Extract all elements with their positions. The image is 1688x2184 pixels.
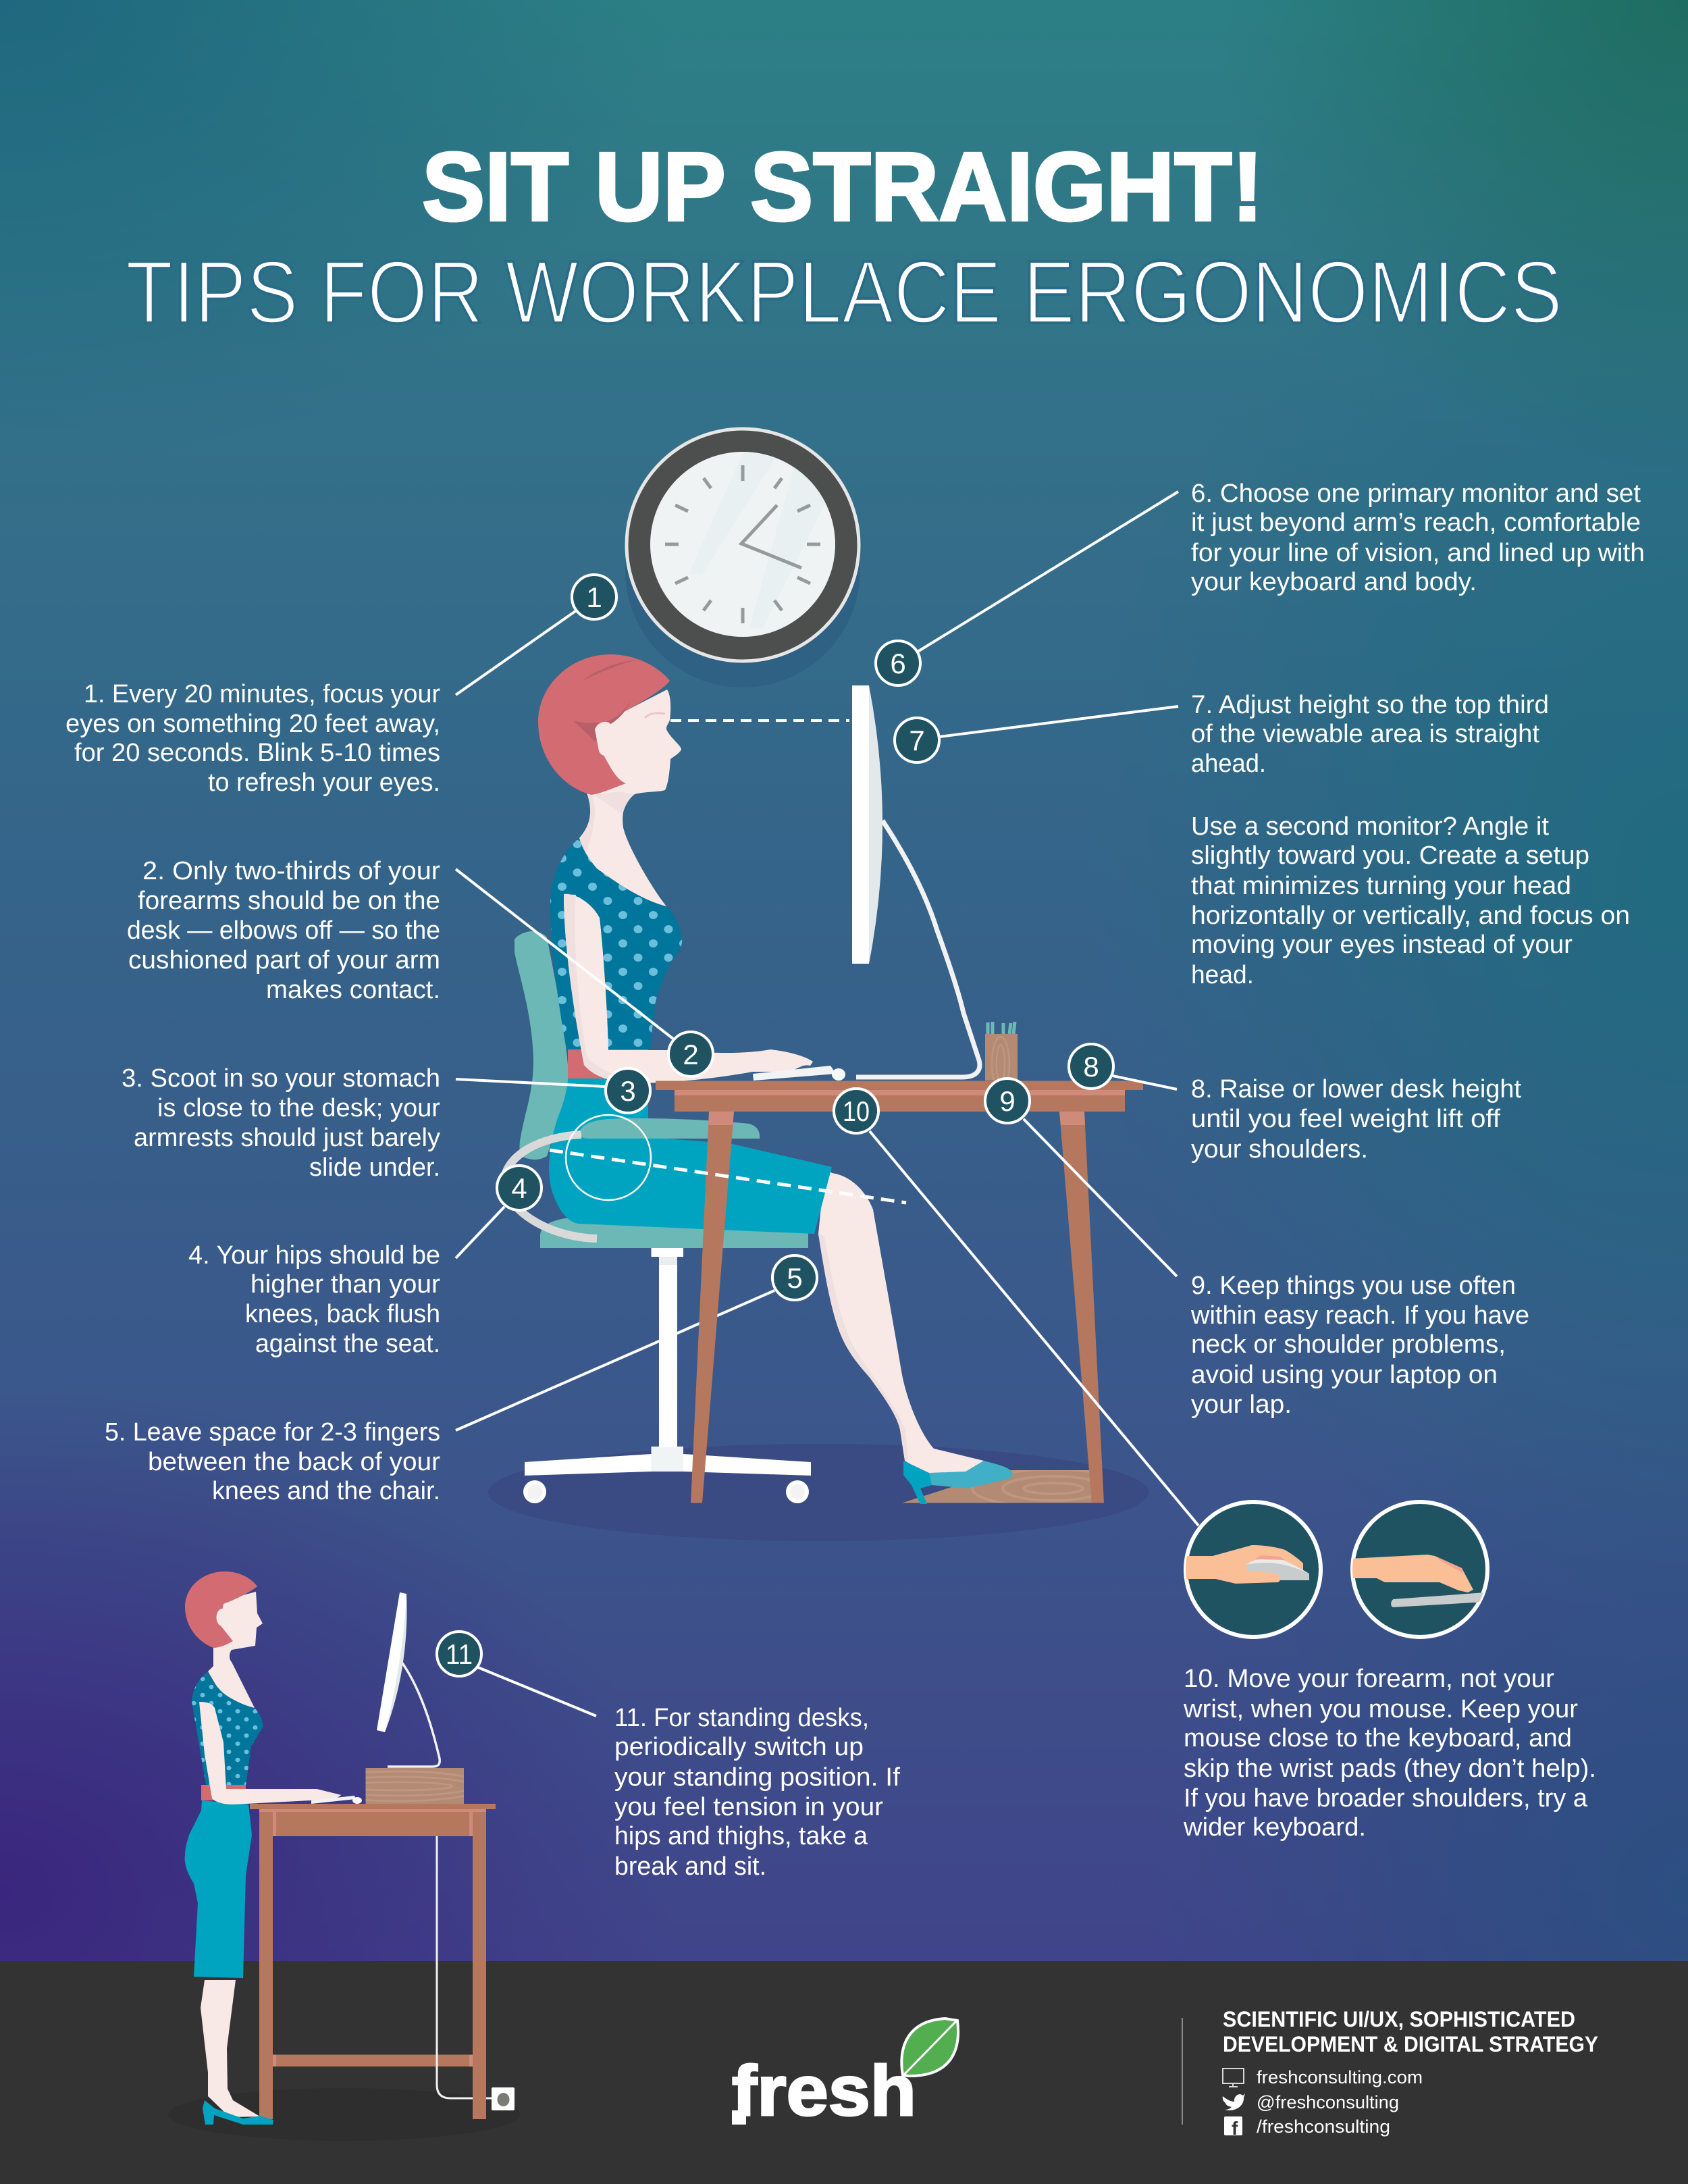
footer tagline	[1223, 2007, 1598, 2056]
tip 8 text: your shoulders.	[1191, 1135, 1368, 1164]
dress dots	[192, 1671, 263, 1786]
footer contact: facebook	[1224, 2116, 1390, 2139]
tip 10 text: If you have broader shoulders, try a	[1184, 1784, 1588, 1813]
heading: sit up straight: SIT UP STRAIGHT!	[422, 132, 1263, 241]
chair seat	[540, 1218, 808, 1248]
dashed eye line	[670, 719, 849, 722]
tip 7 text: of the viewable area is straight	[1191, 720, 1539, 748]
tip 2 text: forearms should be on the	[138, 887, 440, 915]
neck and face	[579, 690, 681, 908]
tip 9 text	[1190, 1272, 1529, 1419]
tip 10 text	[1183, 1665, 1596, 1842]
tip 3 text: 3. Scoot in so your stomach	[122, 1064, 440, 1093]
hip highlight circle	[566, 1115, 651, 1200]
tip 7 text: ahead.	[1191, 750, 1266, 778]
badge 4: 4	[511, 1172, 527, 1204]
badge 8: 8	[1083, 1051, 1099, 1083]
tip 6 text: for your line of vision, and lined up with	[1191, 539, 1645, 567]
badge 7	[895, 718, 939, 762]
tip 11 text: your standing position. If	[614, 1763, 900, 1792]
monitor	[852, 685, 980, 1077]
tip 4 text: higher than your	[250, 1270, 440, 1299]
leg	[201, 1980, 260, 2117]
badge 10	[834, 1089, 878, 1133]
tip 9 text: within easy reach. If you have	[1190, 1301, 1529, 1330]
tip 11 text	[614, 1704, 900, 1881]
tip 10 text: skip the wrist pads (they don’t help).	[1184, 1754, 1596, 1783]
badge 1	[572, 575, 616, 619]
wooden riser box	[366, 1768, 464, 1804]
eyebrow	[645, 713, 665, 718]
office chair base	[523, 1248, 811, 1503]
badge 5	[772, 1255, 817, 1300]
tip 2 text: makes contact.	[266, 976, 440, 1004]
tip 3 text: slide under.	[309, 1153, 440, 1182]
standing desk	[250, 1804, 496, 2119]
tip 7 text	[1191, 691, 1630, 989]
dress	[192, 1671, 263, 1786]
tip 7 text: 7. Adjust height so the top third	[1191, 691, 1549, 719]
tip 5 text: knees and the chair.	[212, 1477, 440, 1505]
tip 8 text: until you feel weight lift off	[1191, 1105, 1500, 1133]
tip 6 text	[1191, 479, 1645, 596]
dress dots	[550, 838, 682, 1054]
tip 10 text: wrist, when you mouse. Keep your	[1183, 1695, 1578, 1723]
badge 5: 5	[787, 1262, 803, 1294]
tip 9 text: your lap.	[1191, 1390, 1292, 1419]
badge 9	[985, 1078, 1030, 1123]
tip 4 text	[188, 1241, 440, 1358]
ear	[595, 722, 612, 756]
icon: hand on keyboard	[1350, 1502, 1487, 1637]
icon: monitor	[1223, 2069, 1244, 2087]
tip 4 text: against the seat.	[255, 1330, 440, 1358]
footer contact: twitter: @freshconsulting	[1257, 2092, 1399, 2112]
skirt	[185, 1800, 252, 1978]
leader line 5	[456, 1291, 774, 1430]
chair armrest	[580, 1118, 760, 1139]
badge 6	[876, 641, 920, 685]
shoe heel over footrest	[903, 1461, 932, 1504]
tip 7 text: Use a second monitor? Angle it	[1191, 812, 1549, 841]
tip 11 text: 11. For standing desks,	[614, 1704, 869, 1732]
tip 2 text	[127, 857, 440, 1004]
tip 6 text: 6. Choose one primary monitor and set	[1191, 479, 1641, 508]
tip 7 text: horizontally or vertically, and focus on	[1191, 902, 1630, 930]
arm	[199, 1702, 342, 1804]
shoe	[903, 1461, 1013, 1504]
tip 5 text: between the back of your	[148, 1448, 440, 1476]
tip 6 text: your keyboard and body.	[1191, 568, 1477, 596]
tip 10 text: 10. Move your forearm, not your	[1184, 1665, 1554, 1693]
tip 9 text: avoid using your laptop on	[1191, 1361, 1498, 1389]
tip 1 text	[65, 680, 440, 797]
tip 1 text: 1. Every 20 minutes, focus your	[84, 680, 440, 708]
badge 1: 1	[586, 581, 602, 613]
footer tagline: DEVELOPMENT & DIGITAL STRATEGY	[1223, 2032, 1598, 2056]
badge 3: 3	[620, 1075, 636, 1107]
badge 10: 10	[843, 1095, 870, 1127]
standing woman	[185, 1571, 342, 2125]
dashed hip line	[550, 1150, 906, 1203]
footrest	[902, 1470, 1092, 1503]
icon: hand on mouse	[1182, 1502, 1321, 1637]
logo leaf	[901, 2019, 958, 2076]
keyboard and mouse	[753, 1066, 845, 1081]
tip 2 text: cushioned part of your arm	[128, 946, 440, 974]
footer contact: website: freshconsulting.com	[1257, 2067, 1423, 2087]
badge 2: 2	[683, 1039, 699, 1070]
standing monitor	[377, 1592, 440, 1767]
tip 3 text: armrests should just barely	[134, 1124, 440, 1152]
tip 5 text: 5. Leave space for 2-3 fingers	[105, 1418, 440, 1447]
hair shading	[573, 659, 641, 742]
neck and face	[208, 1592, 263, 1709]
icon: wall clock	[625, 429, 860, 687]
arm shade	[564, 894, 641, 1083]
footer divider	[1182, 2018, 1183, 2125]
tip 4 text: 4. Your hips should be	[188, 1241, 440, 1270]
badge 6: 6	[890, 648, 906, 679]
tip 1 text: for 20 seconds. Blink 5-10 times	[74, 739, 440, 767]
floor shadow: sitting desk	[488, 1444, 1149, 1541]
footer tagline: SCIENTIFIC UI/UX, SOPHISTICATED	[1223, 2007, 1575, 2031]
tip 11 text: break and sit.	[614, 1852, 766, 1881]
shoe	[203, 2100, 273, 2125]
tip 2 text: desk — elbows off — so the	[127, 916, 440, 945]
badge 3	[606, 1068, 650, 1113]
tip 8 text: 8. Raise or lower desk height	[1191, 1075, 1521, 1103]
badge 2	[668, 1032, 713, 1076]
floor shadow: standing desk	[168, 2088, 521, 2141]
belt	[201, 1785, 246, 1800]
hair	[185, 1571, 257, 1648]
footer contact: facebook: /freshconsulting	[1257, 2116, 1390, 2137]
tip 9 text: 9. Keep things you use often	[1191, 1272, 1516, 1300]
chair spine curve	[504, 1135, 597, 1239]
tip 6 text: it just beyond arm’s reach, comfortable	[1191, 509, 1641, 537]
tip 4 text: knees, back flush	[245, 1300, 440, 1328]
woman: seated figure	[538, 654, 1013, 1504]
pencil cup	[985, 1021, 1018, 1081]
power cable and outlet	[437, 1836, 515, 2110]
skirt	[549, 1074, 832, 1234]
badge 11	[437, 1632, 481, 1676]
leader lines	[456, 492, 1198, 1716]
arm	[564, 894, 813, 1083]
icon: facebook: f	[1232, 2118, 1238, 2139]
tip 7 text: moving your eyes instead of your	[1191, 931, 1573, 959]
tip 9 text: neck or shoulder problems,	[1191, 1330, 1506, 1359]
badge 9: 9	[999, 1085, 1016, 1117]
logo wordmark: fresh	[732, 2052, 916, 2131]
tip 2 text: 2. Only two-thirds of your	[142, 857, 440, 885]
title	[126, 132, 1562, 342]
tip 1 text: eyes on something 20 feet away,	[65, 710, 440, 738]
badge 7: 7	[909, 725, 925, 756]
tip 7 text: head.	[1191, 961, 1254, 989]
neck shade	[579, 791, 635, 852]
desk	[656, 1081, 1143, 1503]
footer band	[0, 1961, 1688, 2184]
tip 3 text	[122, 1064, 440, 1182]
tip 7 text: slightly toward you. Create a setup	[1191, 841, 1589, 870]
tip 3 text: is close to the desk; your	[157, 1094, 440, 1122]
icon: facebook	[1224, 2116, 1242, 2139]
tip 11 text: you feel tension in your	[614, 1793, 883, 1821]
tip 8 text	[1191, 1075, 1521, 1164]
badge 11: 11	[446, 1638, 473, 1670]
fresh logo	[732, 2019, 958, 2131]
leg shade	[818, 1234, 908, 1461]
badge 4	[497, 1166, 542, 1210]
badge 8	[1069, 1044, 1113, 1089]
tip 11 text: hips and thighs, take a	[614, 1822, 868, 1850]
tip 10 text: mouse close to the keyboard, and	[1184, 1724, 1572, 1752]
ear	[216, 1609, 228, 1626]
tip 1 text: to refresh your eyes.	[208, 769, 440, 797]
dress	[550, 838, 682, 1054]
hair	[538, 654, 670, 795]
tip 11 text: periodically switch up	[614, 1733, 864, 1761]
tip 5 text	[105, 1418, 440, 1505]
leg	[818, 1166, 993, 1476]
standing keyboard and mouse	[311, 1796, 362, 1804]
belt	[568, 1049, 648, 1078]
tip 10 text: wider keyboard.	[1183, 1813, 1366, 1842]
chair back	[515, 931, 568, 1160]
icon: twitter bird	[1223, 2094, 1245, 2110]
tip 7 text: that minimizes turning your head	[1191, 872, 1571, 900]
